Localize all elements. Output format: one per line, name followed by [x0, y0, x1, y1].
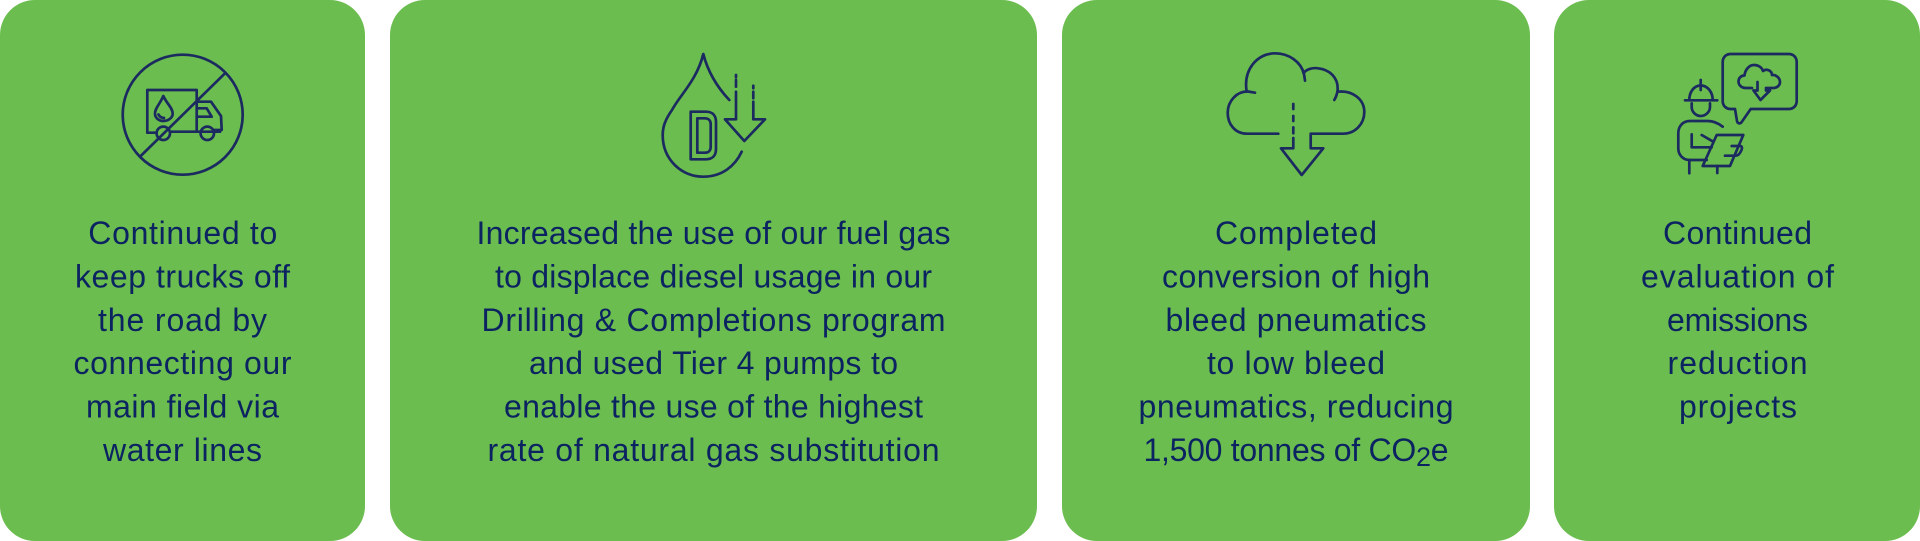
text: trucks off the road: keep trucks off: [75, 258, 290, 294]
text: pneumatics conversion: to low bleed: [1207, 345, 1385, 381]
text: fuel gas displacing diesel: enable the use of the highest: [504, 389, 923, 425]
text: trucks off the road: [74, 215, 292, 468]
text: fuel gas displacing diesel: rate of natural gas substitution: [488, 432, 940, 468]
text: fuel gas displacing diesel: Increased the use of our fuel gas: [476, 215, 950, 251]
text: trucks off the road: connecting our: [74, 345, 292, 381]
panel: pneumatics conversion: [1062, 0, 1530, 541]
text: pneumatics conversion: Completed: [1215, 215, 1377, 251]
text: evaluation of emissions projects: evaluation of: [1641, 258, 1834, 294]
panel: fuel gas displacing diesel: [390, 0, 1037, 541]
icon: fuel drop with D and down arrow: [663, 54, 765, 177]
text: fuel gas displacing diesel: to displace diesel usage in our: [495, 258, 932, 294]
text: pneumatics conversion: conversion of high: [1162, 258, 1430, 294]
text: evaluation of emissions projects: reduction: [1668, 345, 1808, 381]
text: pneumatics conversion: 2: [1416, 442, 1431, 472]
icon: worker with speech bubble: [1678, 54, 1797, 173]
text: fuel gas displacing diesel: [476, 215, 950, 468]
panel: evaluation of emissions projects: [1554, 0, 1920, 541]
text: pneumatics conversion: pneumatics, reducing: [1138, 389, 1454, 425]
text: evaluation of emissions projects: Continued: [1663, 215, 1812, 251]
text: trucks off the road: main field via: [86, 389, 279, 425]
text: evaluation of emissions projects: projects: [1679, 389, 1797, 425]
text: fuel gas displacing diesel: Drilling & Completions program: [482, 302, 946, 338]
text: pneumatics conversion: 1,500 tonnes of CO: [1144, 432, 1416, 468]
text: fuel gas displacing diesel: and used Tier 4 pumps to: [529, 345, 898, 381]
icon: no trucks: [123, 55, 243, 175]
text: evaluation of emissions projects: emissions: [1667, 302, 1808, 338]
text: evaluation of emissions projects: [1641, 215, 1834, 425]
text: trucks off the road: Continued to: [88, 215, 277, 251]
text: pneumatics conversion: bleed pneumatics: [1166, 302, 1426, 338]
text: pneumatics conversion: [1138, 215, 1454, 472]
text: trucks off the road: water lines: [102, 432, 262, 468]
panel: trucks off the road: [0, 0, 365, 541]
icon: cloud with down arrow: [1228, 53, 1364, 175]
text: trucks off the road: the road by: [98, 302, 267, 338]
text: pneumatics conversion: e: [1431, 432, 1448, 468]
